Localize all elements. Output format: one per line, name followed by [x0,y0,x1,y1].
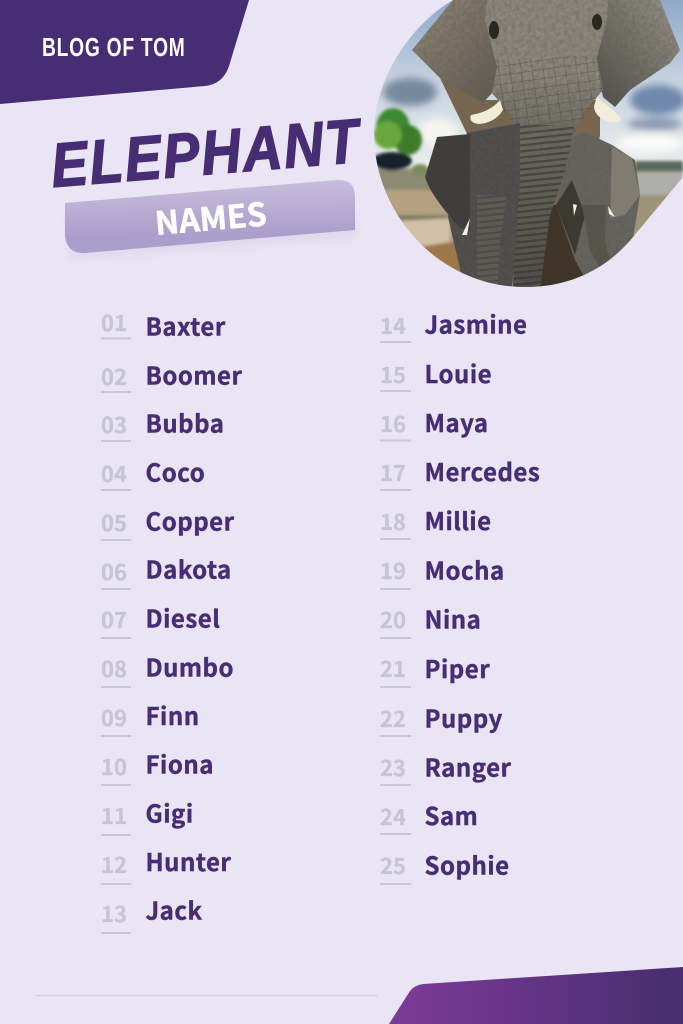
row 06 [101,550,232,589]
trunk [513,125,574,290]
row 12: 12 [101,848,127,880]
row 01: 01 [101,306,127,338]
row 14: Jasmine [424,306,527,340]
row 09: Finn [146,697,200,732]
row 12: Hunter [146,843,231,878]
row 02: 02 [101,360,127,392]
row 15 [380,355,492,391]
row 22 [380,700,503,736]
row 08: Dumbo [146,648,234,684]
row 07: 07 [101,603,127,635]
row 21: Piper [424,650,490,685]
head [485,0,608,133]
row 01 [101,306,226,342]
row 16: 16 [380,407,406,439]
row 18 [380,502,492,539]
row 17 [380,453,540,490]
row 17: 17 [380,456,406,488]
photo: elephant family [370,0,683,290]
names list: right column [380,306,540,884]
left ear [412,0,500,103]
row 14 [380,306,527,342]
right calf [556,132,640,278]
row 02: Boomer [146,356,242,392]
row 03 [101,404,224,441]
row 11 [101,794,194,835]
row 11: 11 [101,799,127,831]
row 15: Louie [424,355,492,390]
row 23 [380,748,512,785]
header banner [0,0,249,104]
row 05 [101,502,235,540]
row 07: Diesel [146,600,220,634]
row 11: Gigi [146,794,194,830]
row 20: Nina [424,600,481,636]
row 16: Maya [424,404,489,439]
row 25: 25 [380,849,406,881]
row 04: 04 [101,457,127,489]
row 19: Mocha [424,552,505,586]
row 24: 24 [380,800,406,832]
row 18: 18 [380,505,406,537]
subtitle banner [65,180,358,260]
row 25 [380,846,510,884]
row 13 [101,892,202,933]
row 12 [101,843,231,884]
row 15: 15 [380,358,406,390]
row 24 [380,797,478,834]
eyes [489,21,499,39]
row 23: 23 [380,751,406,783]
names list: left column [101,306,242,933]
row 07 [101,600,220,638]
ground [370,168,683,290]
row 25: Sophie [424,846,510,882]
row 24: Sam [424,797,478,832]
row 05: 05 [101,506,127,538]
row 20 [380,600,481,638]
row 14: 14 [380,309,406,341]
brand name: BLOG OF TOM [42,32,185,62]
row 06: 06 [101,555,127,587]
row 10 [101,746,214,785]
tree [372,108,683,176]
row 04: Coco [146,454,205,488]
row 19 [380,552,505,589]
row 01: Baxter [146,308,226,342]
row 16 [380,404,489,440]
row 08: 08 [101,652,127,684]
row 06: Dakota [146,550,232,586]
footer banner [389,967,683,1024]
row 02 [101,356,242,392]
row 19: 19 [380,554,406,586]
left calf [425,123,520,290]
big elephant body [440,78,600,290]
row 22: 22 [380,702,406,734]
right ear [595,0,680,107]
row 21: 21 [380,652,406,684]
row 10: 10 [101,750,127,782]
row 13: Jack [146,892,202,926]
row 10: Fiona [146,746,214,780]
row 03: Bubba [146,404,224,440]
row 03: 03 [101,408,127,440]
row 04 [101,454,205,490]
tusks [470,100,503,124]
subtitle text: NAMES [153,189,268,245]
row 05: Copper [146,502,235,538]
row 23: Ranger [424,748,512,784]
row 22: Puppy [424,700,503,734]
row 20: 20 [380,603,406,635]
row 13: 13 [101,897,127,929]
row 09 [101,697,200,736]
title: elephant: ELEPHANT [48,106,365,201]
row 09: 09 [101,701,127,733]
sky [370,0,683,175]
row 18: Millie [424,502,492,537]
row 08 [101,648,234,687]
row 17: Mercedes [424,453,540,488]
row 21 [380,650,490,687]
